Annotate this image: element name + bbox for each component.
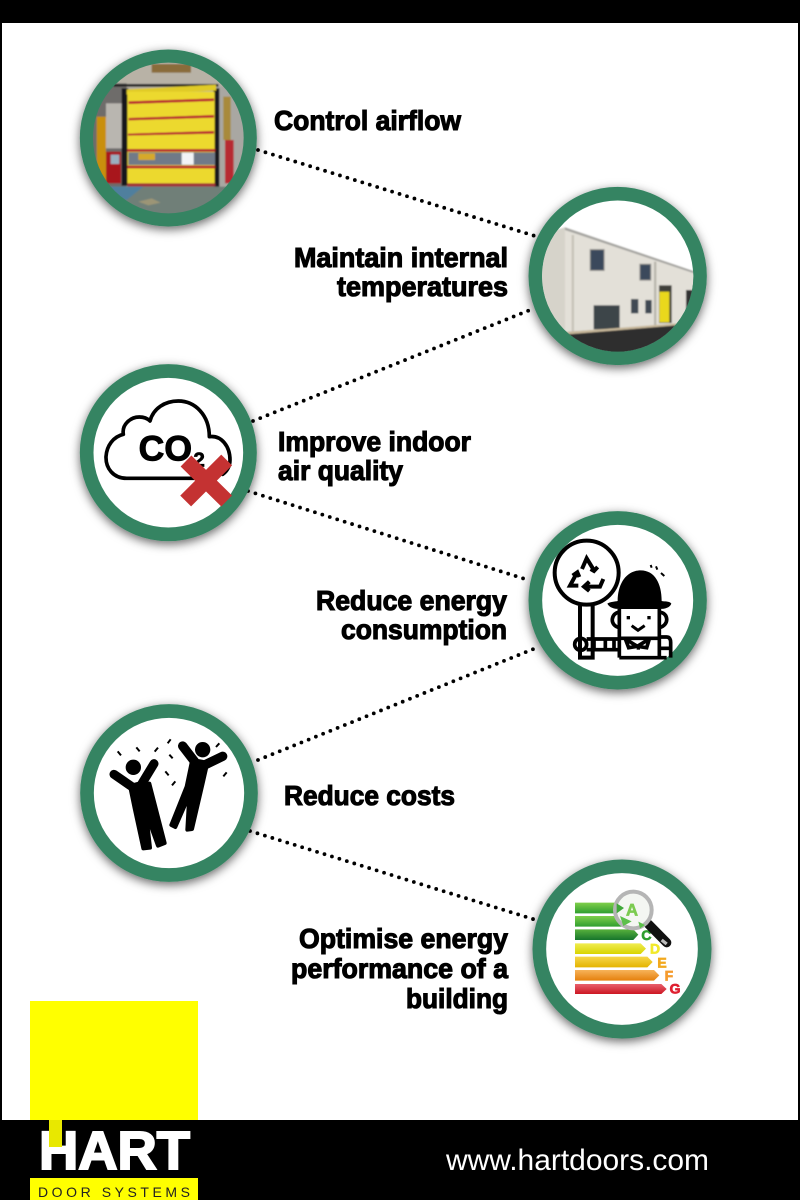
icon: cloud outline: [106, 401, 230, 478]
circle: energy rating icon: [539, 866, 705, 1032]
heading: Maintain internal temperatures: temperatures: [337, 271, 508, 302]
icon: red cross: [186, 460, 227, 501]
icon: recycling sign: [555, 541, 619, 658]
website address: www.hartdoors.com: [445, 1144, 709, 1177]
dotted connector: air quality to energy consumption: [248, 491, 528, 580]
logo: Hart Door Systems: [30, 1001, 198, 1200]
icon: face details: [627, 616, 651, 650]
footer bar: [0, 1120, 800, 1200]
heading: Improve indoor air quality: air quality: [278, 455, 403, 486]
circle: yellow high speed door photo: [87, 56, 250, 220]
heading: Optimise energy performance of a building: [291, 923, 508, 1014]
circle: celebrating people icon: [87, 711, 251, 875]
logo: HART wordmark: HART: [39, 1121, 190, 1181]
top black bar: [0, 0, 800, 23]
icon: face: [575, 609, 671, 658]
chart: rating letters: G: [670, 981, 681, 997]
icon: CO2 label: CO: [139, 429, 192, 468]
left edge strip: [0, 0, 2, 1200]
dotted connector: airflow to temperatures: [258, 150, 535, 236]
chart: energy rating arrows: [575, 903, 667, 994]
icon: recycling arrows: [570, 558, 603, 591]
icon: magnifying glass: [615, 892, 667, 944]
dotted connector: energy consumption to costs: [258, 648, 536, 760]
heading: Improve indoor air quality: Improve indoor: [278, 426, 471, 457]
chart: rating letters: E: [657, 954, 667, 970]
icon: bowler hat: [607, 570, 671, 609]
right edge strip: [798, 0, 800, 1200]
icon: right figure: [171, 742, 223, 830]
heading: Optimise energy performance of a building: Optimise energy: [299, 923, 508, 954]
heading: Reduce energy consumption: [316, 585, 507, 645]
icon: subscript 2: 2: [193, 449, 205, 472]
heading: Maintain internal temperatures: [294, 242, 508, 302]
circle: recycling man icon: [535, 518, 700, 683]
heading: Control airflow: Control airflow: [274, 105, 461, 136]
chart: rating letters: D: [650, 940, 660, 956]
heading: Reduce energy consumption: Reduce energy: [316, 585, 507, 616]
heading: Reduce energy consumption: consumption: [341, 614, 507, 645]
chart: rating letters: F: [665, 968, 674, 984]
heading: Optimise energy performance of a building: performance of a: [291, 953, 508, 984]
heading: Maintain internal temperatures: Maintain internal: [294, 242, 508, 273]
logo: yellow block: [30, 1001, 198, 1120]
logo: yellow strip: [30, 1178, 198, 1200]
logo: DOOR SYSTEMS: DOOR SYSTEMS: [38, 1184, 190, 1200]
dotted connector: temperatures to air quality: [253, 308, 535, 421]
circle: CO2 cloud icon: [87, 371, 250, 534]
heading: Reduce costs: Reduce costs: [284, 780, 455, 811]
photo: warehouse door: [90, 60, 247, 217]
heading: Improve indoor air quality: [278, 426, 471, 486]
icon: shine marks: [651, 565, 664, 576]
icon: left figure: [114, 760, 165, 848]
heading: Optimise energy performance of a building: building: [406, 983, 508, 1014]
chart: rating letters: C: [641, 927, 651, 943]
photo: white industrial unit: [540, 227, 696, 357]
icon: magnifying glass: A: [626, 901, 638, 920]
logo: door tab: [49, 1120, 62, 1147]
chart: rating letters: [641, 927, 681, 997]
circle: factory building photo: [535, 194, 700, 358]
icon: motion marks: [118, 739, 227, 785]
dotted connector: costs to energy performance: [250, 831, 536, 920]
